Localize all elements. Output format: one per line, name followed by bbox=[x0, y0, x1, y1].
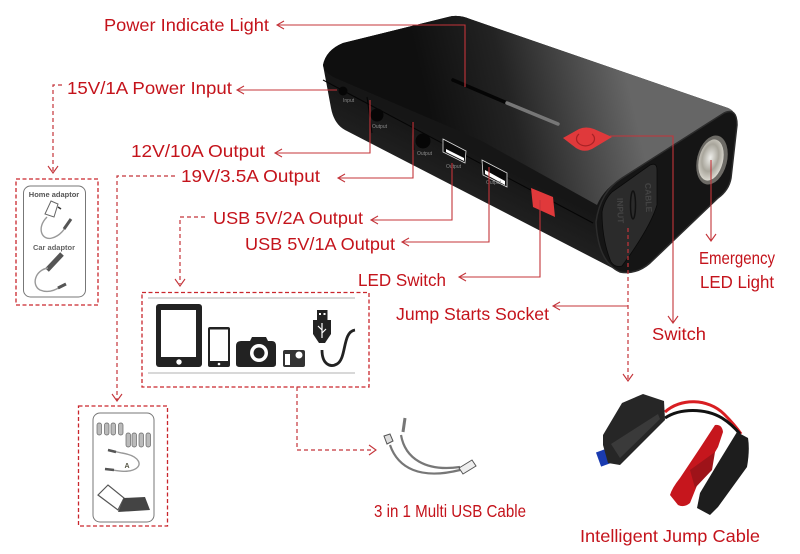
label: Emergency LED Light bbox=[699, 160, 775, 292]
icon: action camera bbox=[283, 350, 305, 367]
ports bbox=[338, 86, 433, 157]
panel: usb devices bbox=[142, 292, 369, 387]
label: Jump Starts Socket bbox=[396, 228, 633, 381]
label: 12V/10A Output: 12V/10A Output bbox=[131, 141, 265, 161]
label: USB 5V/2A Output bbox=[175, 163, 452, 286]
device body bbox=[323, 16, 737, 273]
label: Jump Starts Socket: Jump Starts Socket bbox=[396, 304, 549, 324]
ports: Output bbox=[417, 151, 433, 157]
ports: Output bbox=[372, 124, 388, 130]
label: 19V/3.5A Output: 19V/3.5A Output bbox=[181, 166, 320, 186]
heading: car adaptor: Car adaptor bbox=[33, 243, 75, 252]
label: 15V/1A Power Input: 15V/1A Power Input bbox=[67, 78, 232, 98]
label: Intelligent Jump Cable: Intelligent Jump Cable bbox=[580, 526, 760, 546]
connector to USB cable bbox=[297, 387, 376, 455]
usb ports: Output bbox=[486, 180, 502, 186]
input cap: CABLE bbox=[643, 183, 654, 213]
icon: car plug bbox=[35, 254, 66, 291]
icon: intelligent jump cable bbox=[596, 394, 749, 515]
icon: tablet bbox=[156, 304, 202, 367]
icon: connector tips bbox=[97, 423, 150, 447]
label: Switch bbox=[610, 136, 706, 344]
end face bbox=[596, 112, 737, 273]
label: Power Indicate Light bbox=[104, 15, 465, 87]
label: Power Indicate Light: Power Indicate Light bbox=[104, 15, 269, 35]
icon: laptop bbox=[98, 485, 150, 512]
panel: laptop adaptors bbox=[78, 406, 168, 526]
label: Switch: Switch bbox=[652, 324, 706, 344]
icon: wall plug bbox=[41, 201, 71, 238]
icon: camera bbox=[236, 337, 276, 367]
icon: 3 in 1 multi USB cable bbox=[384, 418, 476, 474]
input cap bbox=[602, 164, 657, 266]
icon: phone bbox=[208, 327, 230, 367]
label: 12V/10A Output bbox=[131, 100, 370, 161]
label: USB 5V/1A Output: USB 5V/1A Output bbox=[245, 234, 395, 254]
input cap: INPUT bbox=[615, 198, 626, 224]
emergency lamp bbox=[691, 132, 733, 188]
ports: Input bbox=[343, 98, 355, 104]
label: 15V/1A Power Input bbox=[48, 78, 337, 173]
label: Emergency LED Light: LED Light bbox=[700, 272, 774, 292]
panel: adaptors bbox=[16, 179, 98, 305]
label: LED Switch: LED Switch bbox=[358, 270, 446, 290]
seam bbox=[323, 80, 593, 223]
icon: adapter cable: A bbox=[124, 463, 130, 470]
heading: home adaptor: Home adaptor bbox=[29, 190, 79, 199]
label: LED Switch bbox=[358, 200, 540, 290]
LED switch button bbox=[531, 188, 555, 217]
label: Emergency LED Light: Emergency bbox=[699, 248, 775, 268]
label: 19V/3.5A Output bbox=[112, 122, 413, 401]
label: 3 in 1 Multi USB Cable: 3 in 1 Multi USB Cable bbox=[374, 501, 526, 521]
label: USB 5V/1A Output bbox=[245, 167, 489, 254]
top face bbox=[323, 16, 733, 205]
icon: usb plug bbox=[313, 310, 355, 365]
power bank device bbox=[323, 16, 737, 273]
usb ports bbox=[443, 139, 507, 187]
label: USB 5V/2A Output: USB 5V/2A Output bbox=[213, 208, 363, 228]
usb ports: Output bbox=[446, 164, 462, 170]
indicator slot bbox=[453, 80, 558, 124]
power button bbox=[563, 128, 612, 151]
